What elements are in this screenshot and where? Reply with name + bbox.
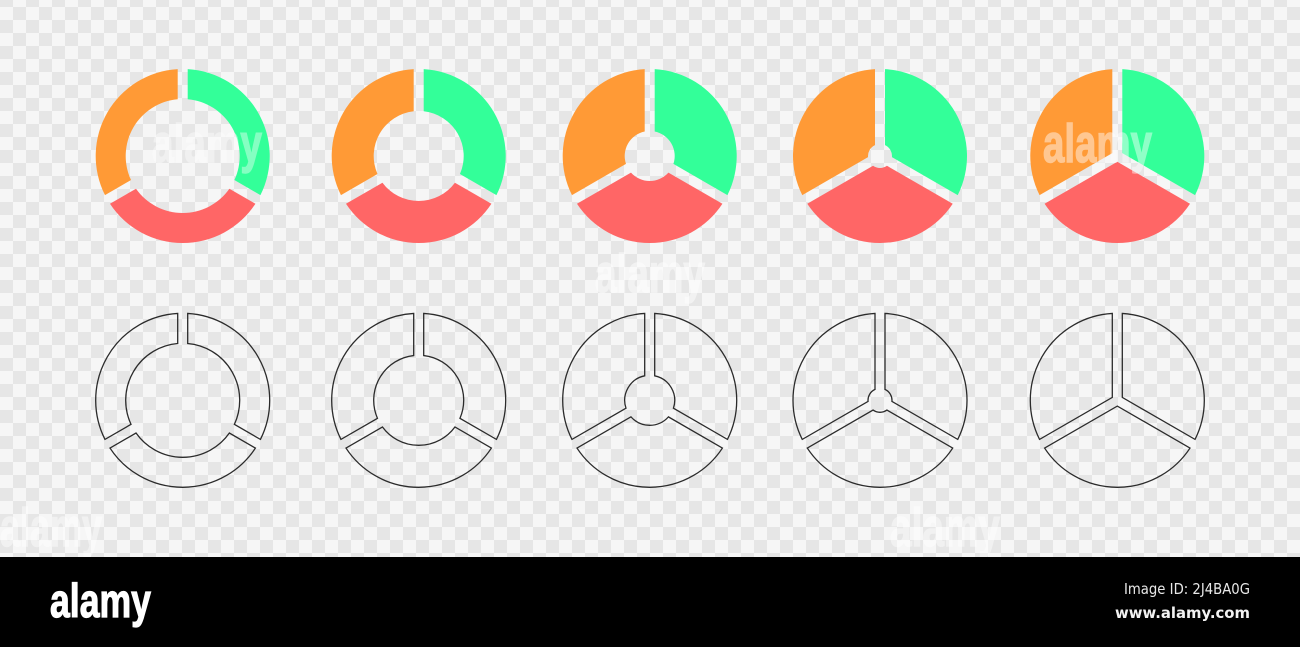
outline segment: left: [64, 305, 214, 439]
segment: orange: [761, 61, 911, 195]
outline segment: bottom: [341, 385, 491, 519]
outline segment: right: [655, 313, 737, 439]
segment: orange: [531, 61, 681, 195]
outline donut chart 2: [300, 305, 506, 519]
outline segment: left: [761, 305, 911, 439]
watermark below chart 3: alamy: [595, 244, 705, 304]
filled pie chart 5: [999, 61, 1204, 275]
segment: green: [188, 69, 270, 195]
segment: green: [1122, 69, 1204, 195]
segment: red: [803, 141, 953, 275]
segment: red: [572, 141, 722, 275]
segment: red: [341, 141, 491, 275]
footer bar: [0, 557, 1300, 647]
image id: Image ID: 2J4BA0G: [1124, 580, 1250, 598]
outline donut chart 1: [64, 305, 270, 519]
outline segment: bottom: [572, 385, 722, 519]
segment: orange: [64, 61, 214, 195]
segment: orange: [999, 61, 1149, 195]
outline segment: bottom: [1040, 385, 1190, 519]
outline segment: left: [999, 305, 1149, 439]
outline segment: right: [188, 313, 270, 439]
filled donut chart 1: [64, 61, 270, 275]
outline donut chart 3: [531, 305, 737, 519]
outline segment: right: [1122, 313, 1204, 439]
outline segment: right: [424, 313, 506, 439]
segment: green: [424, 69, 506, 195]
outline segment: right: [885, 313, 967, 439]
segment: green: [655, 69, 737, 195]
segment: red: [1040, 141, 1190, 275]
outline segment: bottom: [105, 385, 255, 519]
outline pie chart 5: [999, 305, 1204, 519]
watermarks: [0, 114, 1152, 558]
outline segment: left: [531, 305, 681, 439]
filled donut chart 4: [761, 61, 967, 275]
watermark bottom centre right: alamy: [890, 498, 1000, 558]
filled donut chart 3: [531, 61, 737, 275]
segment: red: [105, 141, 255, 275]
outline segment: left: [300, 305, 450, 439]
outline donut chart 4: [761, 305, 967, 519]
filled donut chart 2: [300, 61, 506, 275]
watermark over chart 1: alamy: [152, 114, 262, 174]
footer logo: alamy: [50, 574, 151, 627]
watermark bottom left: alamy: [0, 498, 102, 558]
segment: green: [885, 69, 967, 195]
website url: www.alamy.com: [1115, 604, 1250, 622]
outline segment: bottom: [803, 385, 953, 519]
segment: orange: [300, 61, 450, 195]
watermark over chart 5: alamy: [1043, 114, 1152, 174]
